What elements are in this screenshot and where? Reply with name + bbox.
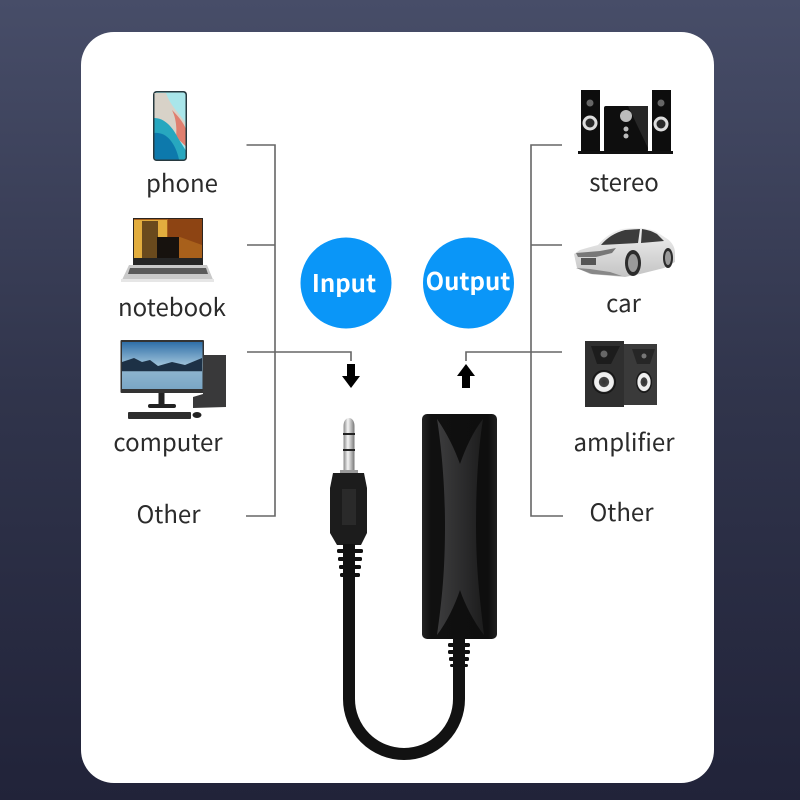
badge: output — [423, 238, 514, 328]
panel: white card — [81, 32, 714, 783]
icon: amplifier speakers — [585, 341, 657, 407]
connector lines: input bracket — [246, 145, 351, 516]
label: amplifier: amplifier — [573, 423, 675, 458]
icon: computer — [120, 340, 226, 419]
jack plug metal — [344, 418, 354, 472]
label: notebook: notebook — [118, 288, 226, 323]
label: computer: computer — [113, 423, 223, 458]
icon: stereo — [578, 90, 673, 154]
badge: input: Input — [312, 264, 376, 299]
label: stereo: stereo — [589, 163, 659, 198]
icon: car — [574, 228, 675, 277]
arrow: up — [457, 364, 475, 388]
icon: phone — [153, 91, 187, 161]
label: phone: phone — [146, 164, 218, 199]
jack body — [330, 473, 367, 545]
product: isolator cable — [330, 414, 497, 754]
badge: input — [300, 238, 392, 328]
label: other output: Other — [589, 493, 654, 528]
badge: output: Output — [426, 262, 510, 297]
jack strain relief — [337, 544, 363, 577]
box emblem — [437, 419, 484, 635]
connector lines: output bracket — [466, 145, 563, 516]
arrow: down — [342, 364, 360, 388]
box strain relief — [448, 639, 470, 667]
icon: notebook — [121, 218, 214, 282]
box body — [422, 414, 497, 639]
cable — [349, 570, 459, 754]
label: car: car — [606, 284, 642, 319]
label: other input: Other — [136, 495, 201, 530]
